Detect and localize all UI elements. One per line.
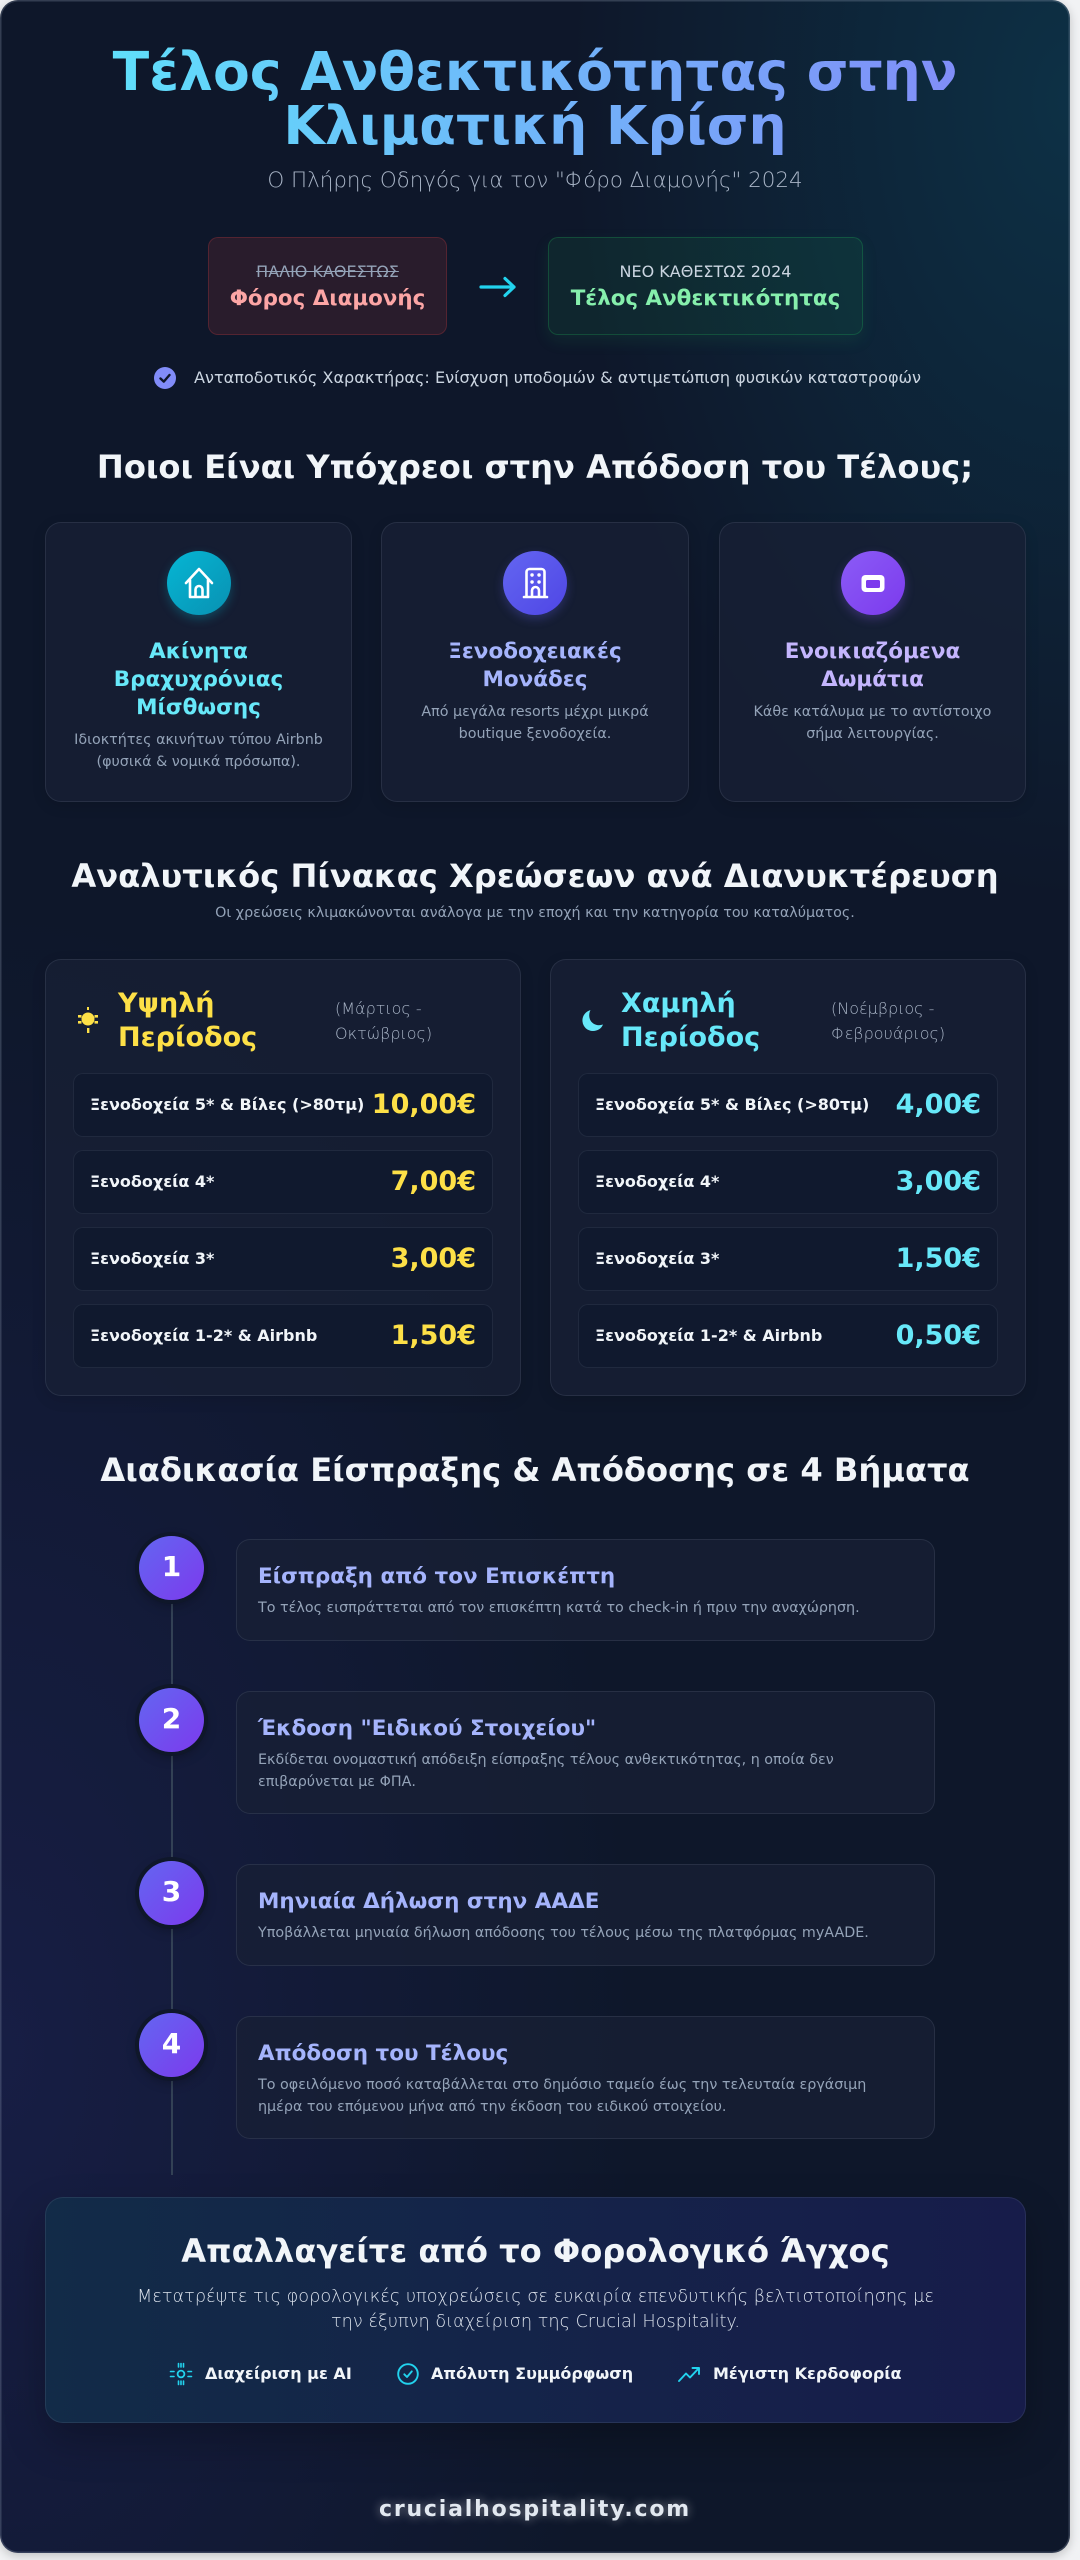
reciprocal note: Ανταποδοτικός Χαρακτήρας: Ενίσχυση υποδομών & αντιμετώπιση φυσικών καταστροφών [194,368,921,387]
row: 4 star: 7,00€ [391,1166,476,1197]
icon: check badge [154,367,176,389]
panel: hotel units [381,522,689,802]
old regime box [208,237,447,335]
step description [258,1752,834,1790]
row: 4 star [578,1150,998,1214]
card title: Μίσθωσης [136,695,261,720]
old regime label: ΠΑΛΙΟ ΚΑΘΕΣΤΩΣ [256,262,399,280]
step number: 2 [162,1702,181,1735]
step 1 [135,1532,935,1641]
feature label: Διαχείριση με AI [205,2364,352,2383]
season months [831,999,945,1043]
icon: room [841,551,905,615]
row: 1-2 star: 1,50€ [391,1320,476,1351]
icon: trending up [678,2367,700,2382]
season months [335,999,432,1043]
card description: Ιδιοκτήτες ακινήτων τύπου Airbnb [74,732,323,748]
heading: process: Διαδικασία Είσπραξης & Απόδοσης σε 4 Βήματα [100,1451,970,1489]
step number: 4 [162,2027,181,2060]
timeline line [171,1600,173,2175]
season months: Οκτώβριος) [335,1024,432,1043]
panel: call to action [45,2197,1026,2423]
row: 3 star: 3,00€ [391,1243,476,1274]
step description: επιβαρύνεται με ΦΠΑ. [258,1774,416,1790]
subtitle: Ο Πλήρης Οδηγός για τον "Φόρο Διαμονής" 2024 [267,168,803,193]
card title [448,639,622,692]
season months: (Μάρτιος - [335,999,422,1018]
row: 4 star: Ξενοδοχεία 4* [595,1172,719,1191]
row: 3 star: Ξενοδοχεία 3* [595,1249,719,1268]
row: 3 star: Ξενοδοχεία 3* [90,1249,214,1268]
card description: Από μεγάλα resorts μέχρι μικρά [421,704,649,720]
step number [139,1688,204,1752]
step description: ημέρα του επόμενου μήνα από την έκδοση του ειδικού στοιχείου. [258,2099,726,2115]
step description: Το οφειλόμενο ποσό καταβάλλεται στο δημόσιο ταμείο έως την τελευταία εργάσιμη [258,2077,866,2093]
row: 1-2 star: Ξενοδοχεία 1-2* & Airbnb [90,1326,317,1345]
cta title: Απαλλαγείτε από το Φορολογικό Άγχος [181,2232,890,2270]
icon: moon [582,1010,603,1031]
season title [118,988,257,1052]
step title: Έκδοση "Ειδικού Στοιχείου" [258,1716,596,1741]
row: 1-2 star: 0,50€ [896,1320,981,1351]
step card [236,1539,935,1641]
step card [236,2016,935,2139]
feature label: Απόλυτη Συμμόρφωση [431,2364,633,2383]
title: Κλιματική Κρίση [283,94,787,157]
card title: Ενοικιαζόμενα [785,639,960,664]
old regime name: Φόρος Διαμονής [230,286,425,311]
step number: 3 [162,1875,181,1908]
footer url: crucialhospitality.com [379,2497,691,2522]
title [100,45,970,159]
row: 1-2 star: Ξενοδοχεία 1-2* & Airbnb [595,1326,822,1345]
row: 5 star: Ξενοδοχεία 5* & Βίλες (>80τμ) [90,1095,364,1114]
row: 5 star [73,1073,493,1137]
season title [621,988,760,1052]
icon: house [167,551,231,615]
step number: 1 [162,1550,181,1583]
row: 3 star [578,1227,998,1291]
row: 4 star: 3,00€ [896,1166,981,1197]
arrow [479,276,516,298]
card description [74,732,323,770]
row: 5 star: Ξενοδοχεία 5* & Βίλες (>80τμ) [595,1095,869,1114]
card description [754,704,991,742]
panel: low season [550,959,1026,1396]
panel: high season [45,959,521,1396]
card description [421,704,649,742]
season title: Περίοδος [621,1022,760,1052]
cta description [137,2287,934,2332]
card description: (φυσικά & νομικά πρόσωπα). [97,754,300,770]
step 3 [135,1857,935,1966]
step number [139,2013,204,2077]
row: 1-2 star [578,1304,998,1368]
panel: short-term rentals [45,522,352,802]
card title [785,639,960,692]
card title: Ξενοδοχειακές [448,639,622,664]
charges subtitle: Οι χρεώσεις κλιμακώνονται ανάλογα με την εποχή και την κατηγορία του καταλύματος. [215,905,855,921]
row: 3 star: 1,50€ [896,1243,981,1274]
card title: Βραχυχρόνιας [114,667,283,692]
step description: Το τέλος εισπράττεται από τον επισκέπτη κατά το check-in ή πριν την αναχώρηση. [258,1600,860,1616]
cta description: την έξυπνη διαχείριση της Crucial Hospitality. [331,2312,740,2332]
step description [258,2077,866,2115]
row: 1-2 star [73,1304,493,1368]
panel: rented rooms [719,522,1026,802]
row: 4 star: Ξενοδοχεία 4* [90,1172,214,1191]
features row [170,2362,902,2386]
step 2 [135,1684,935,1814]
new regime label: ΝΕΟ ΚΑΘΕΣΤΩΣ 2024 [620,262,791,280]
icon: building [503,551,567,615]
step card [236,1864,935,1966]
new regime box [548,237,863,335]
season title: Χαμηλή [621,988,736,1019]
season title: Υψηλή [118,988,215,1019]
new regime name: Τέλος Ανθεκτικότητας [571,286,840,311]
step 4 [135,2009,935,2139]
step title: Μηνιαία Δήλωση στην ΑΑΔΕ [258,1889,599,1914]
row: 5 star [578,1073,998,1137]
heading: charges table: Αναλυτικός Πίνακας Χρεώσεων ανά Διανυκτέρευση [71,857,999,895]
row: 3 star [73,1227,493,1291]
step number [139,1861,204,1925]
card description: σήμα λειτουργίας. [806,726,939,742]
step description: Υποβάλλεται μηνιαία δήλωση απόδοσης του τέλους μέσω της πλατφόρμας myAADE. [258,1925,869,1941]
card description: boutique ξενοδοχεία. [459,726,611,742]
icon: ai chip [170,2362,192,2386]
step title: Απόδοση του Τέλους [258,2041,508,2066]
step description: Εκδίδεται ονομαστική απόδειξη είσπραξης τέλους ανθεκτικότητας, η οποία δεν [258,1752,834,1768]
card title: Δωμάτια [821,667,924,692]
row: 5 star: 10,00€ [372,1089,476,1120]
step title: Είσπραξη από τον Επισκέπτη [258,1564,615,1589]
feature label: Μέγιστη Κερδοφορία [713,2364,902,2383]
card title: Μονάδες [482,667,588,692]
icon: check circle [397,2363,419,2385]
card title: Ακίνητα [149,639,248,664]
step card [236,1691,935,1814]
card description: Κάθε κατάλυμα με το αντίστοιχο [754,704,991,720]
row: 5 star: 4,00€ [896,1089,981,1120]
heading: who is liable: Ποιοι Είναι Υπόχρεοι στην Απόδοση του Τέλους; [97,448,973,486]
icon: sun [78,1007,98,1033]
row: 4 star [73,1150,493,1214]
season months: (Νοέμβριος - [831,999,934,1018]
cta description: Μετατρέψτε τις φορολογικές υποχρεώσεις σε ευκαιρία επενδυτικής βελτιστοποίησης με [137,2287,934,2307]
card title [114,639,283,720]
season title: Περίοδος [118,1022,257,1052]
title: Τέλος Ανθεκτικότητας στην [113,40,957,103]
season months: Φεβρουάριος) [831,1024,945,1043]
step number [139,1536,204,1600]
